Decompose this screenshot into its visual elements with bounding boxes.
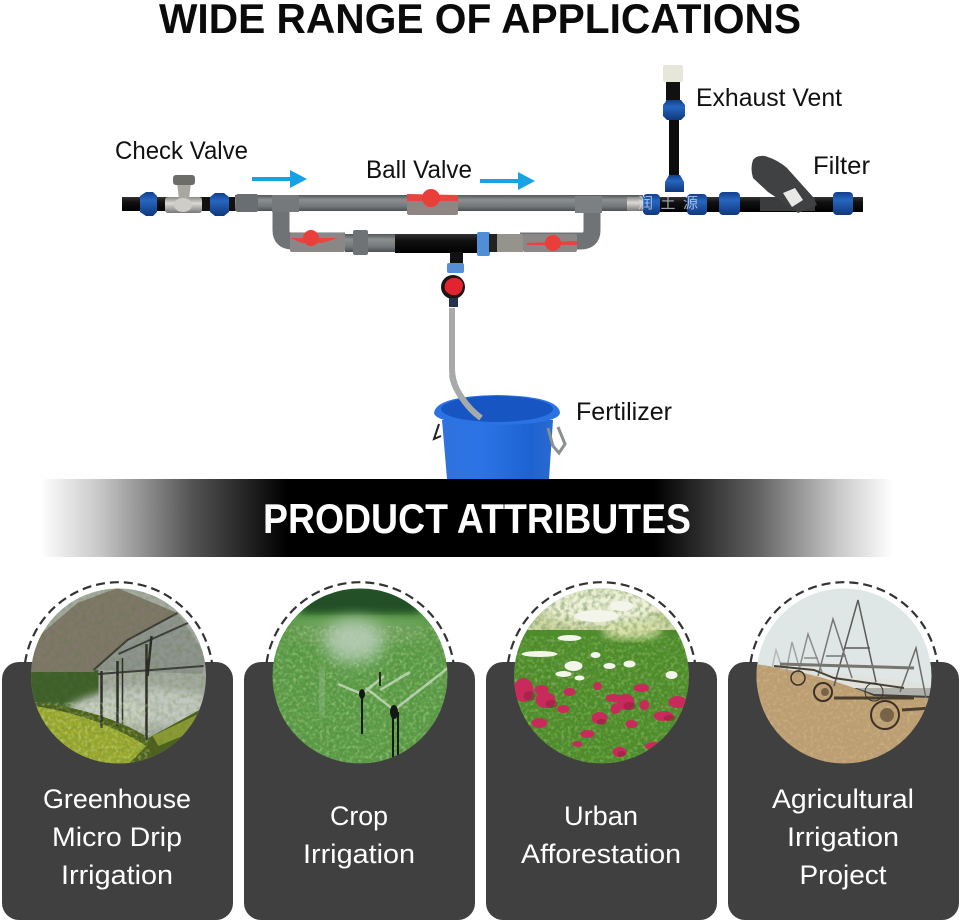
pipe: left black inlet — [122, 197, 235, 211]
label: check valve: Check Valve — [115, 137, 248, 165]
fitting: suction connector — [447, 263, 464, 273]
exhaust vent riser — [663, 65, 685, 192]
ball valve: main line — [407, 189, 458, 215]
check valve — [165, 175, 202, 213]
caption: Project — [800, 860, 887, 890]
caption — [43, 784, 191, 890]
union fitting — [345, 230, 395, 255]
photo: flower beds — [514, 588, 690, 764]
venturi injector body — [395, 232, 498, 265]
caption: Micro Drip — [52, 822, 182, 852]
fitting: left blue coupling — [140, 192, 157, 216]
dashed arc — [508, 582, 695, 663]
dashed arc — [25, 582, 212, 663]
photo: greenhouse — [30, 588, 206, 764]
ball valve: lower left — [290, 230, 345, 252]
banner: product attributes — [40, 479, 893, 557]
bucket: fertilizer — [434, 375, 565, 479]
pipe: grey main line — [235, 194, 643, 213]
caption — [772, 784, 914, 890]
arrow: flow direction left — [252, 170, 307, 188]
label: fertilizer: Fertilizer — [576, 398, 672, 426]
label: ball valve: Ball Valve — [366, 156, 472, 184]
label: filter: Filter — [813, 152, 870, 180]
caption — [303, 801, 415, 869]
banner: product attributes: PRODUCT ATTRIBUTES — [263, 495, 691, 542]
pipe: right black tee and outlet — [643, 192, 863, 215]
suction dial valve — [441, 275, 465, 307]
watermark on tee: 润土源 — [638, 195, 698, 212]
caption: Agricultural — [772, 784, 914, 814]
label: exhaust vent: Exhaust Vent — [696, 84, 842, 112]
panel: crop irrigation — [244, 582, 475, 920]
suction hose — [452, 308, 481, 418]
filter — [752, 156, 817, 213]
caption: Irrigation — [303, 839, 415, 869]
diagram: fertilizer injector assembly — [122, 65, 863, 479]
caption: Afforestation — [521, 839, 681, 869]
panel: greenhouse micro drip irrigation — [2, 582, 233, 920]
caption: Crop — [330, 801, 388, 831]
panel: urban afforestation — [486, 582, 717, 920]
fitting: second blue coupling — [202, 193, 236, 216]
caption: Irrigation — [61, 860, 173, 890]
caption: Urban — [564, 801, 638, 831]
caption — [521, 801, 681, 869]
bypass pipe: lower grey loop — [281, 205, 592, 241]
arrow: flow direction right — [480, 172, 535, 190]
dashed arc — [750, 582, 938, 663]
caption: Irrigation — [787, 822, 899, 852]
dashed arc — [266, 582, 454, 663]
caption: Greenhouse — [43, 784, 191, 814]
ball valve: lower right — [497, 234, 577, 252]
panel: agricultural irrigation project — [728, 582, 959, 920]
photo: sprinklers over crops — [272, 584, 448, 764]
photo: center pivot irrigation — [756, 588, 932, 764]
